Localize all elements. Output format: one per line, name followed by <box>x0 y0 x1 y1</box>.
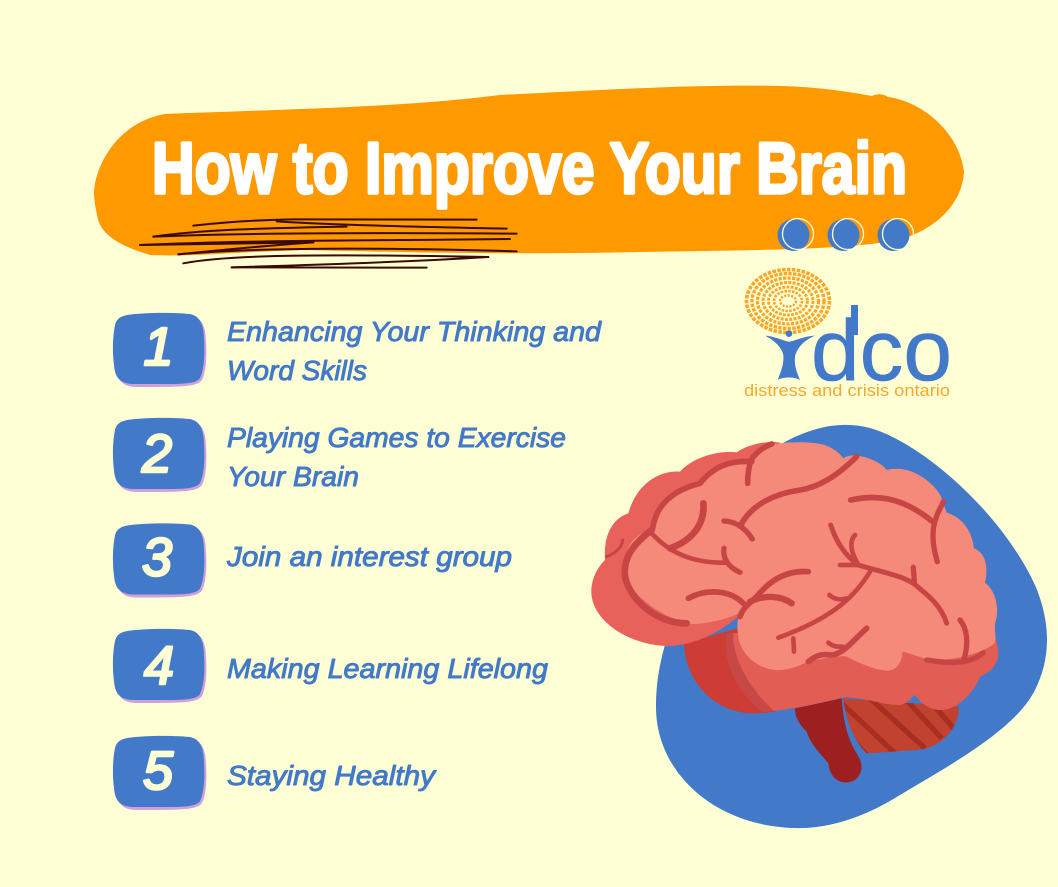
cerebellum stripes <box>840 698 955 755</box>
brain sulci <box>607 444 983 662</box>
number badge 5: 5 <box>143 741 174 801</box>
lower lobe layer <box>733 620 998 711</box>
title text: How to Improve Your Brain <box>152 129 907 209</box>
list item 1 <box>113 313 602 387</box>
cerebellum <box>843 698 959 753</box>
main light cortex <box>624 442 997 671</box>
blue background blob <box>656 425 1047 828</box>
number badge 1 <box>113 313 206 387</box>
logo tree canopy <box>746 270 830 332</box>
number badge 4 <box>113 629 206 703</box>
inner band <box>726 633 777 713</box>
decorative dots <box>778 218 914 251</box>
orange brush shape <box>94 86 964 255</box>
logo tagline: distress and crisis ontario <box>744 382 950 400</box>
brain stem <box>795 698 861 783</box>
frontal dark lobe <box>591 442 787 646</box>
number badge 3: 3 <box>142 528 172 588</box>
logo letters: dco <box>811 303 952 399</box>
title banner <box>94 86 964 268</box>
scribble underline <box>140 219 517 268</box>
item text 1: Word Skills <box>227 355 367 386</box>
logo: dco <box>744 270 952 400</box>
list item 5 <box>113 736 437 810</box>
logo person icon <box>765 330 815 380</box>
list item 3 <box>113 523 512 598</box>
number badge 4: 4 <box>144 636 174 696</box>
brain hind layer <box>684 620 783 713</box>
item text 3: Join an interest group <box>226 541 512 572</box>
item text 2: Your Brain <box>227 461 359 492</box>
brain illustration <box>591 442 998 783</box>
number badge 5 <box>113 736 206 810</box>
item text 2: Playing Games to Exercise <box>227 422 566 453</box>
list item 2 <box>113 418 566 492</box>
item text 4: Making Learning Lifelong <box>227 653 548 684</box>
number badge 2: 2 <box>141 424 172 484</box>
number badge 3 <box>113 523 206 598</box>
number badge 1: 1 <box>143 317 174 377</box>
item text 2 <box>227 422 566 492</box>
item text 5: Staying Healthy <box>227 760 437 791</box>
item text 1 <box>227 316 602 386</box>
item text 1: Enhancing Your Thinking and <box>227 316 602 347</box>
list item 4 <box>113 629 548 703</box>
number badge 2 <box>113 418 206 492</box>
